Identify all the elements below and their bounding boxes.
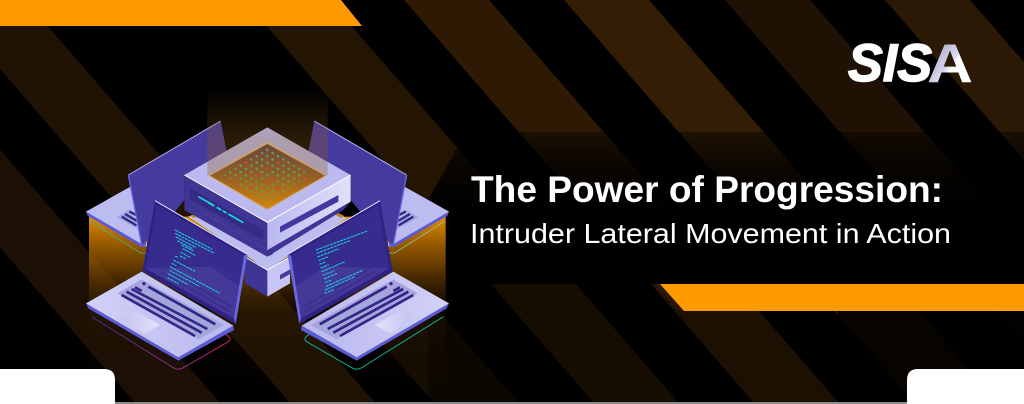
bottom left white tab [0, 369, 115, 404]
logo: SISA: A [927, 32, 973, 94]
back left laptop [86, 121, 227, 253]
translucent light beam [207, 90, 328, 210]
logo: SISA [848, 32, 973, 94]
front left laptop [86, 201, 247, 369]
logo: SISA: SIS [848, 34, 932, 93]
title: The Power of Progression: [471, 169, 943, 210]
server lower tier [188, 202, 351, 297]
orange glow behind laptops [89, 217, 446, 380]
top orange bar [0, 0, 362, 26]
bottom right orange bar [652, 284, 1024, 311]
front right laptop [288, 201, 449, 369]
illustration: isometric server with four laptops [86, 90, 449, 380]
bottom right white tab [907, 369, 1024, 404]
back right laptop [308, 121, 449, 253]
server upper tier [184, 127, 351, 257]
bottom edge line [0, 402, 1024, 404]
subtitle: Intruder Lateral Movement in Action [470, 218, 951, 249]
server glowing LED tray [207, 142, 328, 210]
